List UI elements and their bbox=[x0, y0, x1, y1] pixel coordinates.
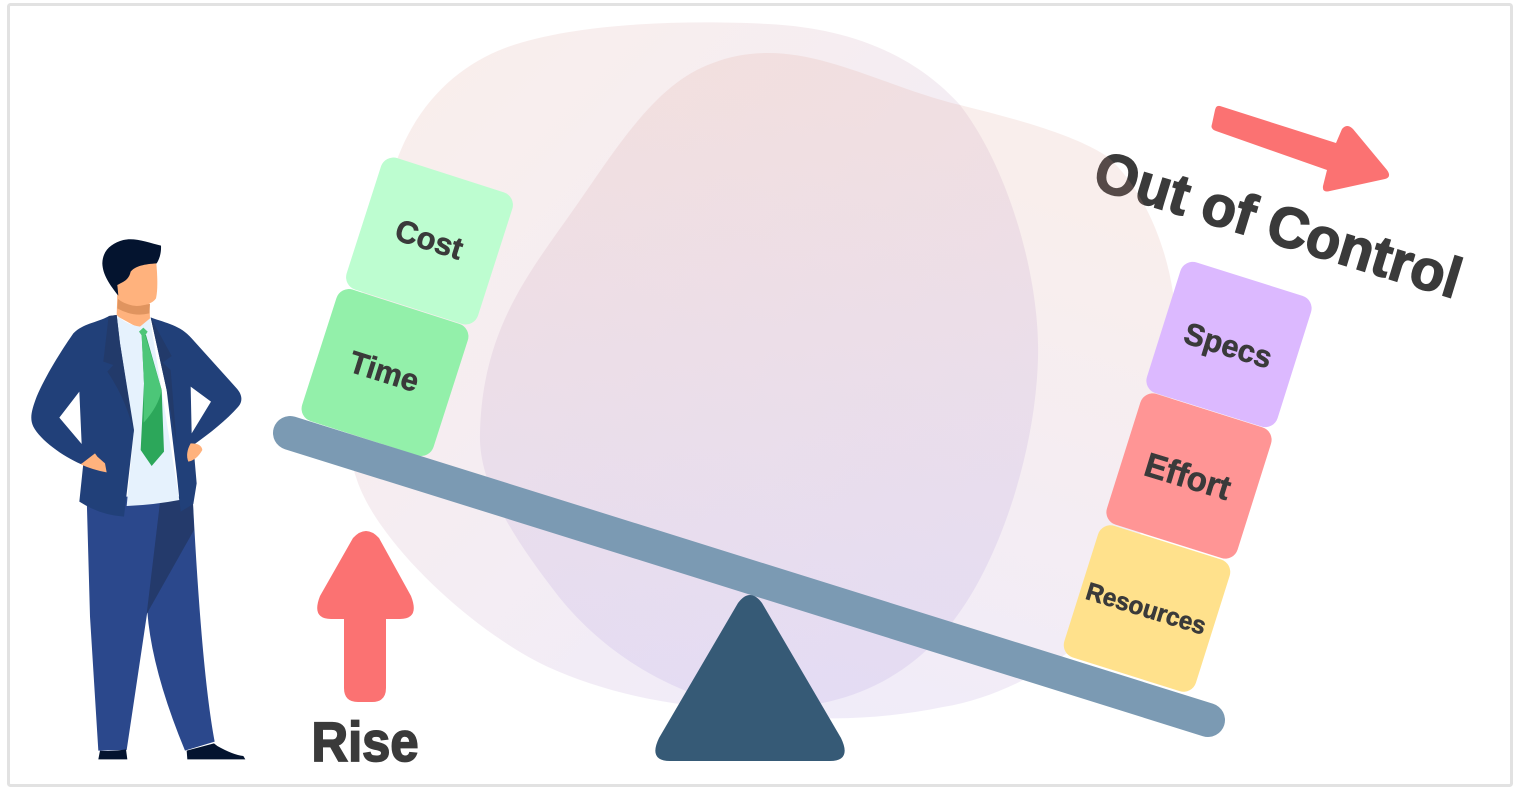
block: Effort bbox=[1103, 390, 1275, 562]
blob: front shape bbox=[480, 53, 1176, 718]
blob: large back shape bbox=[349, 22, 1038, 709]
businessman figure bbox=[31, 239, 245, 759]
heading: Out of Control: Out of Control bbox=[1087, 139, 1469, 311]
block: Resources: Resources bbox=[1083, 577, 1209, 641]
block: Specs bbox=[1143, 259, 1315, 430]
block: Cost: Cost bbox=[391, 212, 467, 267]
block: Time bbox=[298, 286, 472, 459]
block: Cost bbox=[343, 154, 516, 328]
seesaw beam bbox=[290, 433, 1208, 720]
block: Effort: Effort bbox=[1140, 446, 1235, 508]
label: Rise: Rise bbox=[312, 710, 418, 773]
trousers and shoes bbox=[87, 497, 245, 759]
arrow: out of control bbox=[1212, 106, 1389, 191]
block: Specs: Specs bbox=[1180, 316, 1276, 375]
block: Time: Time bbox=[345, 344, 423, 399]
seesaw fulcrum bbox=[655, 595, 845, 761]
arrow: rise bbox=[317, 531, 414, 702]
block: Resources bbox=[1060, 522, 1234, 695]
upper body bbox=[31, 239, 241, 517]
